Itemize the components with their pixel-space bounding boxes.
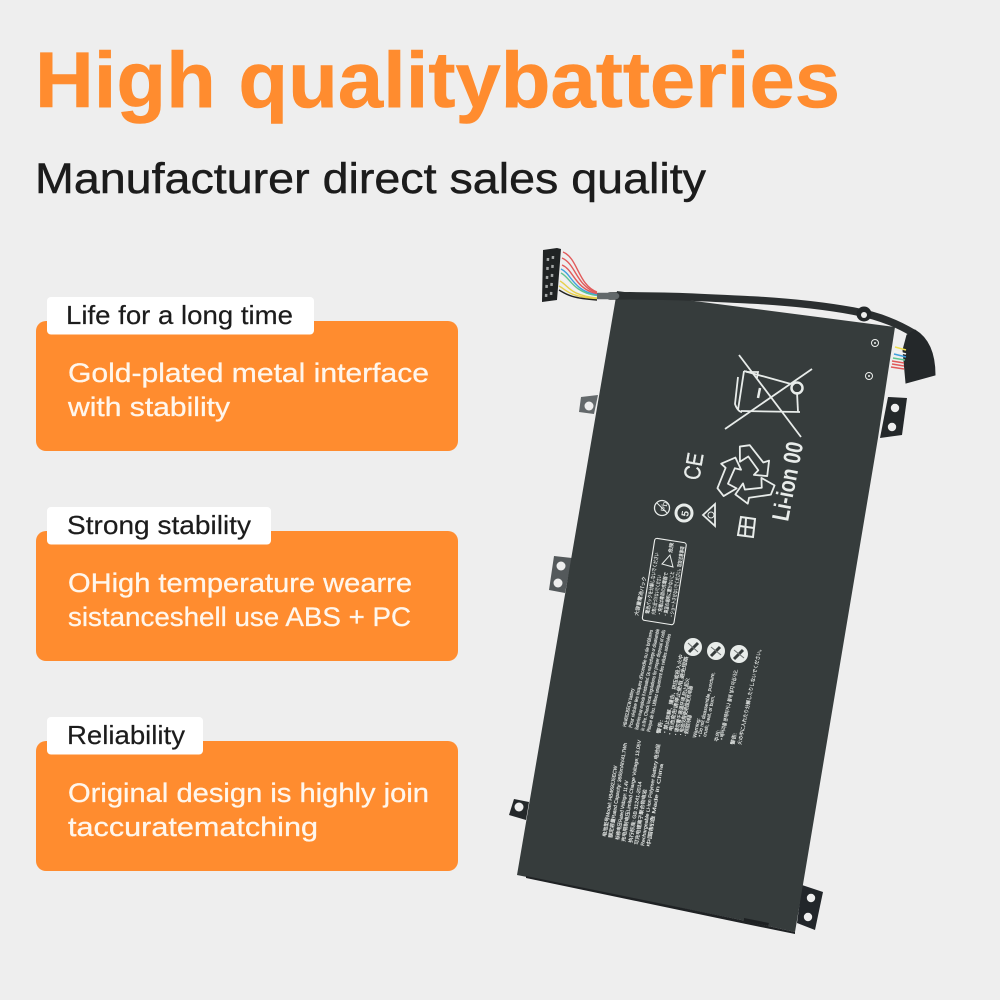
- fine print: model specifications: 中国制造 Made in China: [645, 763, 665, 847]
- text: temperature wear resistance: OHigh temperature wearre: [68, 568, 412, 598]
- fine print: safety text: ・请勿置于高温环境,防止起火: [672, 677, 691, 737]
- heading: strong stability: Strong stability: [67, 510, 251, 540]
- panel: strong stability: [36, 507, 458, 661]
- fine print: safety text: ・电池变形请停止使用,避免短路: [666, 656, 690, 737]
- fine print: safety text: 警告:: [729, 732, 738, 745]
- text: original design: Original design is highly join: [68, 778, 429, 808]
- warning box: ・充電は専用の充電器で: [656, 572, 670, 616]
- warning box: 電池パックを分解しないでください: [644, 552, 661, 614]
- text: gold-plated interface: Gold-plated metal interface: [68, 358, 429, 388]
- icon: certification mark: [738, 517, 755, 537]
- icon: regulatory marks: 5: [680, 510, 692, 518]
- fine print: safety text: ・使用指定充电器: [682, 714, 694, 737]
- icon: recycling arrows: [704, 442, 779, 518]
- fine print: safety text: crush, heat, or burn.: [702, 695, 717, 737]
- fine print: safety text: Warning:: [692, 718, 702, 738]
- tab: reliability: [47, 717, 203, 754]
- text: temperature wear resistance: [68, 568, 412, 632]
- fine print: safety text: in a fire. Check local regulations for proper disposal of cells: [640, 629, 667, 731]
- connector wires: [559, 252, 597, 300]
- subtitle: Manufacturer direct sales quality: [35, 155, 707, 203]
- warning box: ・ショートさせないでください。取扱注意事項: [668, 546, 686, 618]
- fine print: safety text: [622, 628, 764, 745]
- fine print: model specifications: 额定容量Rated Capacity: 3665mAh/41.7Wh: [607, 742, 629, 838]
- heading: life for a long time: Life for a long time: [66, 300, 293, 330]
- fine print: model specifications: 电池型号Model: HB4692J5ECW: [601, 765, 619, 837]
- icon: regulatory marks: [654, 500, 715, 526]
- fine print: model specifications: Rechargeable Li-ion Polymer Battery 电池组: [639, 743, 662, 846]
- text: temperature wear resistance: sistanceshell use ABS + PC: [68, 602, 411, 632]
- mounting tabs: [509, 395, 907, 930]
- fine print: model specifications: 执行标准: GB 31241-2014: [627, 781, 644, 843]
- tab: life for a long time: [47, 297, 314, 334]
- fine print: safety text: • Do not disassemble, puncture,: [697, 672, 717, 737]
- icon: crossed-out bin: [725, 355, 812, 437]
- fine print: safety text: ・禁止拆解、撞击、挤压或投入火中: [661, 654, 685, 735]
- fine print: safety text: Pour réduire les risques d'incendie ou de brûlures: [628, 629, 655, 728]
- fine print: model specifications: 标称电压Rated Voltage: 11.4V: [614, 779, 630, 840]
- panel: life for a long time: [36, 297, 458, 451]
- warning box: ・高温の場所に置かないこと: [662, 571, 676, 617]
- battery illustration: [509, 248, 935, 934]
- side wires: [891, 347, 906, 369]
- tab: strong stability: [47, 507, 271, 544]
- fine print: safety text: Batteries may explode if mistreated. Do not recharge or disassemble: [634, 628, 661, 730]
- fine print: model specifications: 充电限制电压Limited Charge Voltage: 13.05V: [620, 739, 643, 842]
- warning box: 危険: [667, 542, 676, 553]
- fine print: model specifications: 可充电锂离子聚合物电池: [633, 789, 649, 845]
- title: High qualitybatteries: [35, 35, 840, 124]
- cable: [598, 296, 935, 383]
- heading: reliability: Reliability: [67, 720, 185, 750]
- fine print: safety text: ・电池仅限使用指定充电器: [677, 685, 695, 737]
- fine print: safety text: 주의:: [713, 729, 722, 742]
- icon: regulatory marks: Pb: [659, 501, 670, 512]
- warning box: 大容量電池パック: [633, 576, 648, 616]
- warning icons: [684, 638, 748, 663]
- fine print: model specifications: [601, 739, 665, 847]
- text: CE mark: CE: [678, 451, 709, 482]
- fine print: safety text: Risque de feu. Utilisez uniquement des cellules autorisées: [646, 633, 673, 732]
- text: li-ion label: Li-ion 00: [767, 439, 809, 523]
- panel: reliability: [36, 717, 458, 871]
- warning box: 火気に近づけないでください: [650, 575, 663, 615]
- fine print: safety text: HB4692J5ECW battery: [622, 688, 636, 727]
- text: original design: [68, 778, 429, 842]
- text: gold-plated interface: [67, 358, 429, 422]
- text: original design: taccuratematching: [68, 812, 318, 842]
- fine print: safety text: 警告:: [655, 719, 665, 734]
- fine print: safety text: • 배터리를 분해하거나 불에 넣지 마십시오.: [718, 669, 740, 740]
- battery body: [517, 291, 895, 932]
- fine print: safety text: 火の中に入れたり分解したりしないでください。: [736, 646, 764, 745]
- text: gold-plated interface: with stability: [67, 392, 231, 422]
- connector: [542, 248, 561, 302]
- warning box: [633, 538, 687, 625]
- screw marks: [866, 340, 878, 380]
